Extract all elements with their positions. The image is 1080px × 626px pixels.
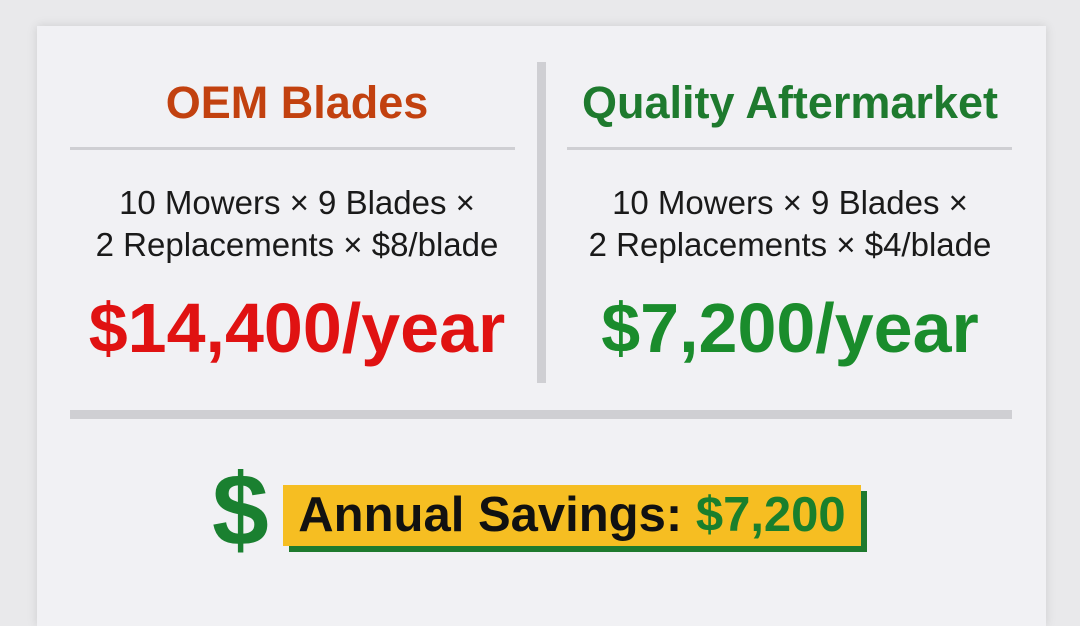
text: OEM formula: 10 Mowers × 9 Blades × (119, 184, 475, 221)
panel: OEM (70, 77, 515, 367)
panel: Aftermarket (567, 77, 1012, 367)
number: aftermarket cost: $7,200/year (601, 289, 979, 367)
text: aftermarket formula (589, 184, 991, 263)
text: OEM formula: 2 Replacements × $8/blade (96, 226, 498, 263)
text: aftermarket formula: 2 Replacements × $4/blade (589, 226, 991, 263)
text: aftermarket formula: 10 Mowers × 9 Blades × (612, 184, 968, 221)
number: OEM cost: $14,400/year (89, 289, 505, 367)
heading: OEM Blades: OEM Blades (166, 77, 428, 128)
callout: annual savings: Annual Savings: $7,200 (298, 488, 846, 542)
text: OEM formula (96, 184, 498, 263)
icon: dollar sign: $ (212, 453, 269, 567)
heading: Quality Aftermarket: Quality Aftermarket (582, 77, 998, 128)
